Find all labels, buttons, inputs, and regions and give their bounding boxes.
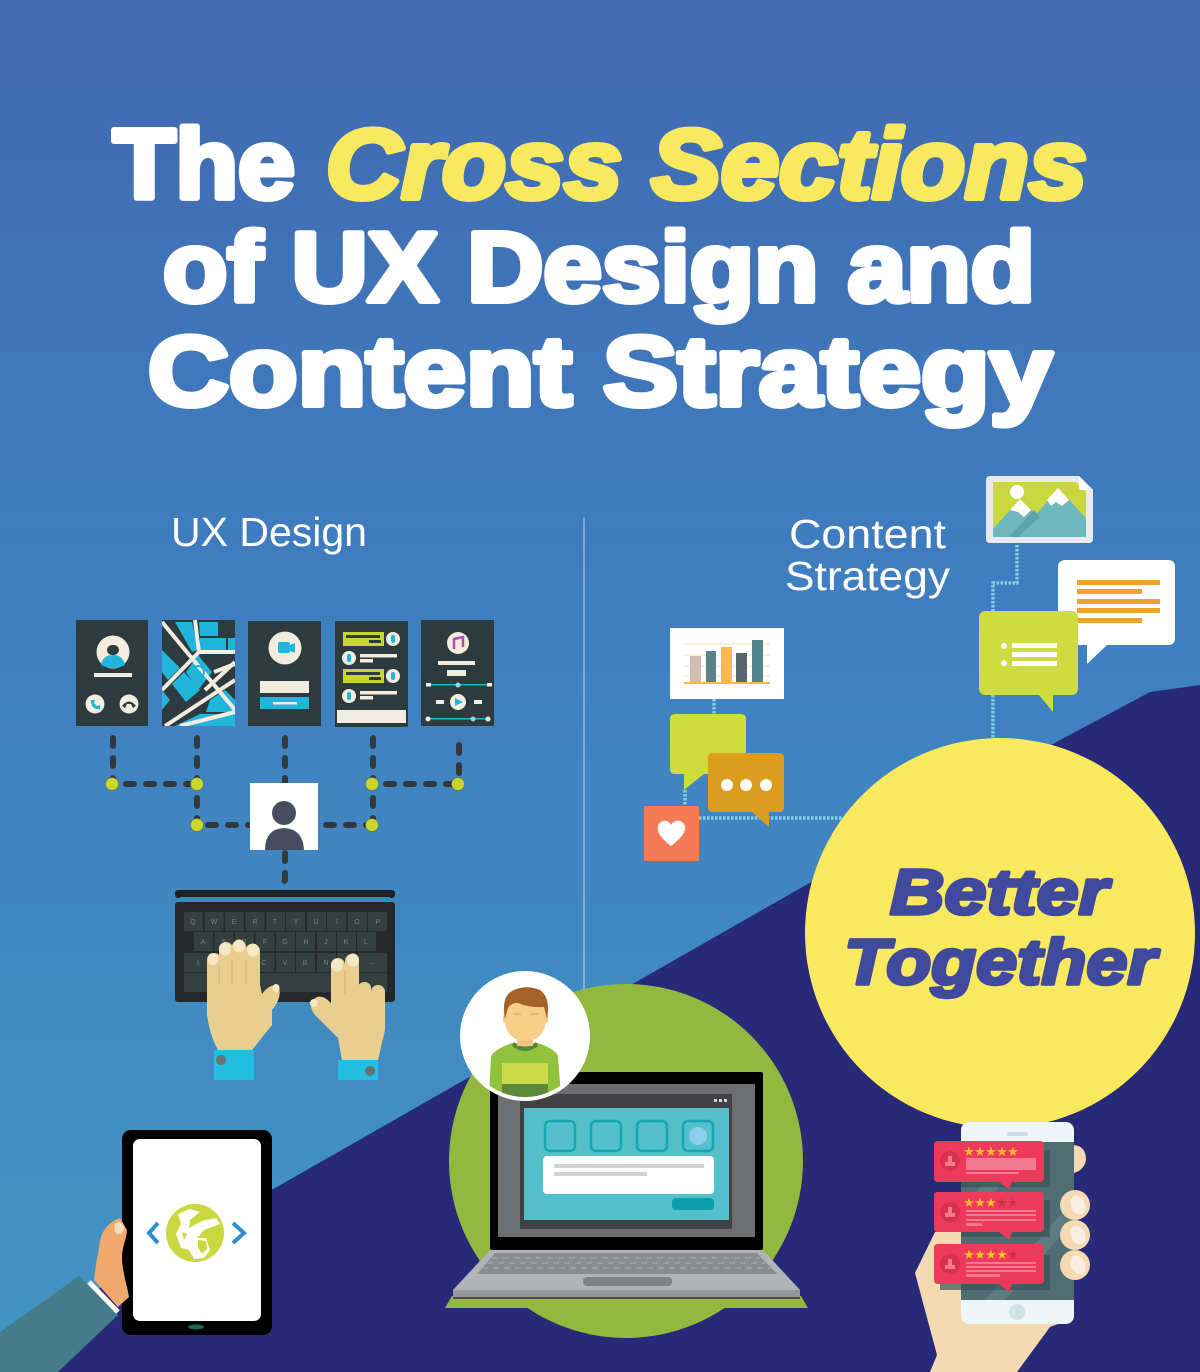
- icon: left hand: [207, 940, 280, 1080]
- icon: keyboard: B: [303, 960, 308, 967]
- review card: three stars: ★: [996, 1195, 1008, 1210]
- icon: keyboard: I: [336, 919, 338, 926]
- review card: five stars: ★: [985, 1144, 997, 1159]
- panel: UX Design flow: [76, 620, 494, 1080]
- review card: three stars: ★: [974, 1195, 986, 1210]
- icon: keyboard: ⇧: [195, 959, 201, 967]
- review card: four stars: ★: [996, 1247, 1008, 1262]
- review card: five stars: ★: [1007, 1144, 1019, 1159]
- icon: keyboard: N: [323, 960, 329, 967]
- icon: keyboard: F: [263, 939, 267, 946]
- callout: Better Together: Together: [844, 926, 1160, 998]
- icon: keyboard: R: [252, 919, 258, 926]
- callout: Better Together: Better: [890, 856, 1112, 928]
- review card shadows: [940, 1150, 1050, 1290]
- icon: globe: [166, 1204, 224, 1262]
- review card: five stars: ★: [974, 1144, 986, 1159]
- icon: keyboard: S: [222, 939, 227, 946]
- icon: keyboard: O: [354, 919, 360, 926]
- review card: three stars: ★: [1007, 1195, 1019, 1210]
- connector nodes: [106, 778, 464, 832]
- sleeve: [0, 1276, 118, 1372]
- green platform: [445, 1296, 808, 1308]
- icon: keyboard: A: [201, 939, 206, 946]
- review card: four stars: [934, 1244, 1044, 1292]
- icon: tablet with hand: [0, 1130, 272, 1372]
- icon: keyboard: C: [261, 960, 267, 967]
- icon: keyboard: P: [376, 919, 381, 926]
- icon: keyboard: D: [241, 939, 247, 946]
- icon: keyboard: W: [211, 919, 218, 926]
- icon: keyboard: G: [282, 939, 288, 946]
- title: Content Strategy: [148, 316, 1052, 426]
- icon: keyboard: [175, 890, 395, 1002]
- heading: Content Strategy: [785, 511, 951, 599]
- panel: laptop on green circle: [445, 984, 808, 1338]
- panel: Content Strategy icons: [644, 476, 1175, 861]
- icon: heart: [644, 806, 699, 861]
- icon: right hand: [310, 954, 385, 1080]
- heading: Content Strategy: Strategy: [785, 553, 951, 599]
- icon: keyboard: Y: [294, 919, 299, 926]
- screen: phone call: [76, 620, 148, 726]
- review card: five stars: [934, 1141, 1044, 1189]
- icon: keyboard: ←: [368, 960, 376, 967]
- review card: four stars: ★: [963, 1247, 975, 1262]
- screen: music player: [421, 620, 494, 726]
- navy diagonal panel: [0, 685, 1200, 1372]
- heading: UX Design: UX Design: [171, 509, 367, 555]
- icon: green list bubble: [979, 611, 1078, 712]
- icon: green speech bubble: [670, 714, 746, 790]
- icon: keyboard: U: [313, 919, 319, 926]
- icon: bar chart: [670, 628, 784, 699]
- title: [113, 109, 1087, 426]
- laptop base: [453, 1250, 800, 1299]
- icon: phone with review cards: [915, 1122, 1090, 1372]
- review card: four stars: ★: [974, 1247, 986, 1262]
- review card: five stars: ★: [996, 1144, 1008, 1159]
- icon: keyboard: K: [344, 939, 349, 946]
- dashed connectors: [113, 738, 459, 888]
- fingers: [1060, 1145, 1090, 1280]
- title: of UX Design and: [163, 212, 1035, 322]
- review card: four stars: ★: [985, 1247, 997, 1262]
- icon: picture: [986, 476, 1093, 543]
- screen: video login: [248, 621, 321, 726]
- icon: keyboard: H: [303, 939, 309, 946]
- icon: keyboard: E: [232, 919, 237, 926]
- review card: three stars: [934, 1192, 1044, 1240]
- icon: keyboard: Q: [190, 919, 196, 926]
- screen: chat: [335, 621, 408, 727]
- icon: keyboard: J: [324, 939, 328, 946]
- laptop lid: [490, 1072, 763, 1250]
- green circle: [449, 984, 803, 1338]
- icon: user profile: [250, 783, 318, 850]
- icon: keyboard: V: [283, 960, 288, 967]
- icon: keyboard: T: [273, 919, 278, 926]
- icon: white speech bubble: [1058, 560, 1175, 664]
- title: Cross Sections: [326, 109, 1087, 219]
- icon: keyboard: L: [364, 939, 368, 946]
- icon: person avatar: [460, 971, 590, 1101]
- icon: orange chat bubble: [708, 753, 784, 827]
- review card: three stars: ★: [985, 1195, 997, 1210]
- center divider: [584, 517, 636, 1063]
- hand: [94, 1218, 129, 1307]
- tablet: [122, 1130, 272, 1335]
- review card: five stars: ★: [963, 1144, 975, 1159]
- review card: three stars: ★: [963, 1195, 975, 1210]
- hand palm: [915, 1230, 1074, 1372]
- code chevrons: [149, 1223, 244, 1243]
- dotted connectors: [685, 545, 1017, 818]
- laptop bezel: [498, 1084, 755, 1237]
- screen: map: [162, 620, 235, 726]
- heading: Content Strategy: Content: [789, 511, 947, 557]
- shirt cuff: [89, 1282, 118, 1312]
- phone body: [961, 1122, 1074, 1324]
- title: The: [113, 109, 295, 219]
- laptop screen: [520, 1094, 732, 1229]
- callout: Better Together: [805, 738, 1195, 1128]
- review card: four stars: ★: [1007, 1247, 1019, 1262]
